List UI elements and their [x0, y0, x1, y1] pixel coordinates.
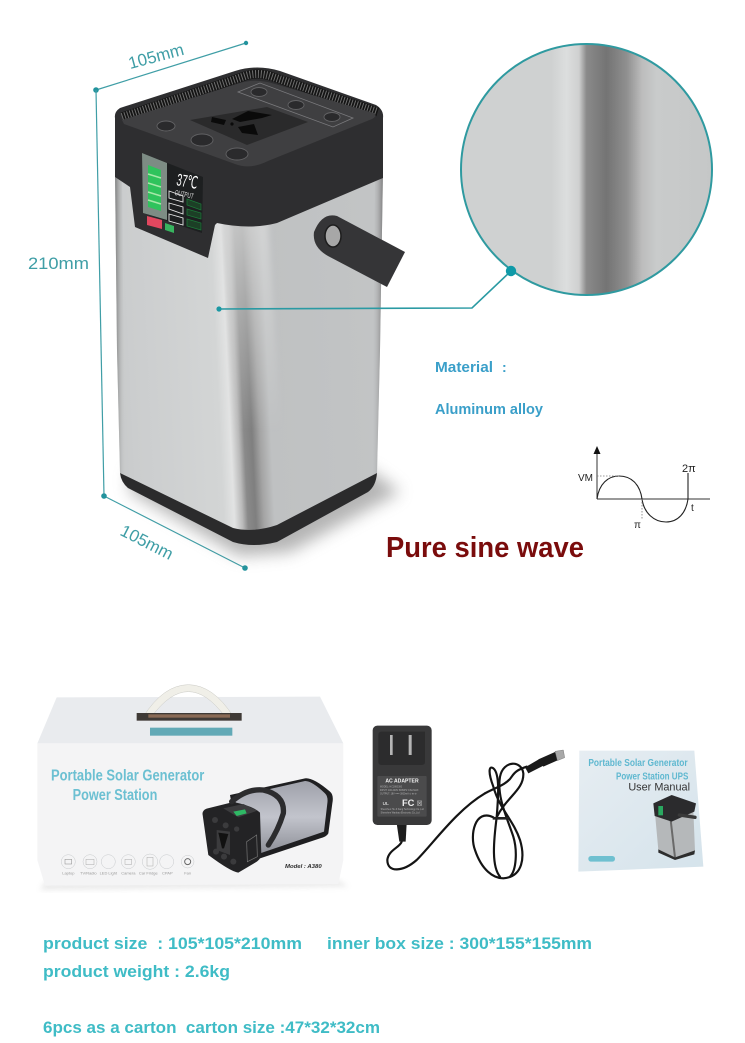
adapter label: Shenzhen Wanbao Electronic Co.,Ltd	[381, 812, 420, 815]
text: material	[435, 359, 543, 418]
chart: sine wave diagram: VM	[578, 473, 593, 484]
box icon captions: Laptop	[62, 871, 75, 876]
adapter label: UL	[383, 801, 389, 806]
box icon captions: Car Fridge	[139, 871, 159, 876]
adapter label: FC	[402, 798, 415, 808]
adapter label: Shenzhen Hu Ji Kang Technology Co.,Ltd	[381, 808, 424, 811]
top ports	[157, 88, 340, 160]
dimension: height 210mm: 210mm	[28, 254, 89, 273]
LCD display: OUTPUT	[174, 188, 195, 201]
top socket panel	[190, 107, 308, 145]
product: AC adapter with cord	[373, 726, 565, 878]
box model label: Model : A380	[285, 864, 323, 870]
spec text block: inner box size : 300*155*155mm	[327, 934, 592, 953]
dimension: top width 105mm	[93, 40, 248, 93]
dimension: bottom depth 105mm: 105mm	[117, 521, 176, 564]
manual title: Portable Solar Generator	[588, 758, 688, 769]
callout: magnified aluminum surface	[216, 44, 712, 312]
chart: sine wave diagram: 2π	[682, 463, 696, 475]
text: material: Aluminum alloy	[435, 402, 543, 418]
adapter label: INPUT: 100-240V 50/60Hz 0.6A MAX	[380, 789, 419, 792]
adapter label: OUTPUT: 18V === 3000mA ⊙ ⊕ ⊖	[380, 793, 417, 796]
chart: sine wave diagram: π	[634, 520, 641, 531]
box icon captions: TV/Radio	[80, 871, 97, 876]
adapter label: ☒	[417, 799, 423, 807]
manual device image	[653, 795, 696, 860]
spec text block: product weight : 2.6kg	[43, 962, 230, 981]
box title: Portable Solar Generator	[51, 768, 204, 785]
chart: sine wave diagram	[578, 446, 710, 531]
box title: Power Station	[73, 787, 157, 804]
LCD display: 37℃	[175, 170, 199, 193]
dimension: top width 105mm: 105mm	[126, 40, 186, 73]
box icon captions: CPAP	[162, 871, 173, 876]
adapter label: MODEL: HC1800300	[380, 786, 403, 788]
box icon captions	[62, 871, 191, 876]
product: power station main view	[115, 68, 405, 556]
chart: sine wave diagram: t	[691, 503, 694, 514]
box title	[51, 768, 204, 804]
carry strap	[314, 215, 405, 287]
product: user manual	[578, 751, 703, 872]
adapter label	[380, 779, 424, 815]
manual title: User Manual	[628, 782, 690, 794]
manual title	[588, 758, 690, 794]
dimension: height 210mm	[28, 90, 104, 496]
manual title: Power Station UPS	[616, 771, 689, 782]
spec text block: 6pcs as a carton carton size :47*32*32cm	[43, 1018, 380, 1037]
product: retail box	[37, 685, 348, 890]
heading: pure sine wave: Pure sine wave	[386, 532, 584, 564]
LCD display	[142, 153, 203, 233]
box icon captions: LED Light	[100, 871, 118, 876]
text: material: Material	[435, 360, 493, 376]
box feature icons	[61, 854, 194, 869]
spec text block: product size : 105*105*210mm	[43, 934, 302, 953]
box product image	[202, 778, 333, 873]
adapter label: AC ADAPTER	[385, 779, 419, 785]
spec text block	[43, 934, 592, 1037]
text: material: :	[502, 359, 507, 375]
dimension: bottom depth 105mm	[101, 493, 248, 571]
box icon captions: Fan	[184, 871, 191, 876]
manual model pill	[588, 856, 615, 862]
box icon captions: Camera	[121, 871, 136, 876]
